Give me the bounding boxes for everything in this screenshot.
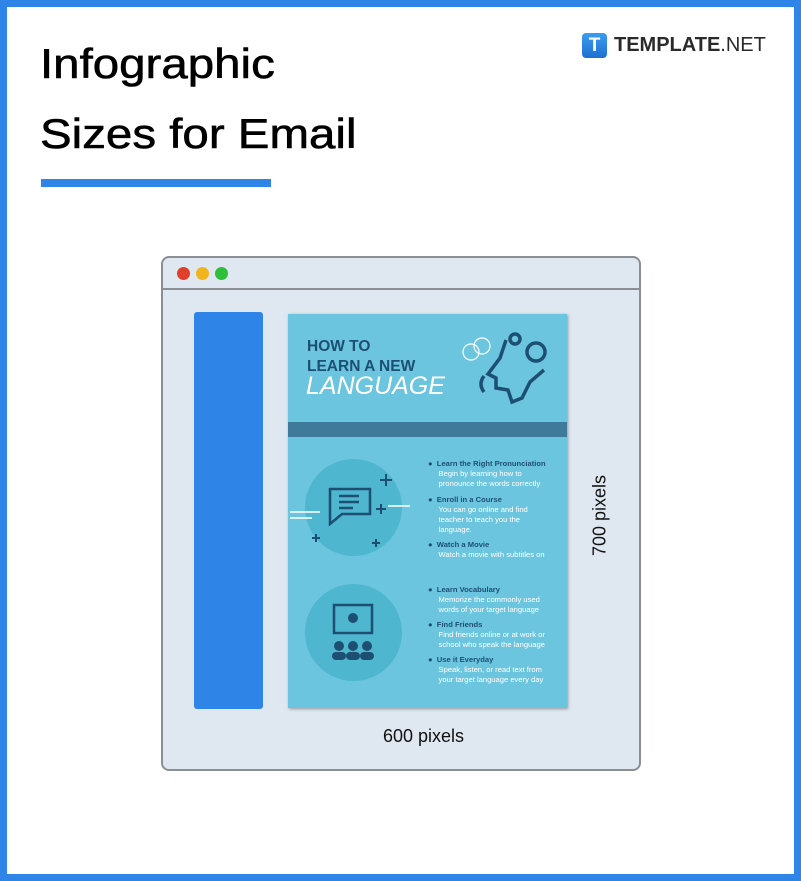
logo: TEMPLATE.NET — [614, 34, 766, 56]
list items: Find friends online or at work or — [439, 630, 545, 639]
list items: pronounce the words correctly — [439, 479, 540, 488]
title: Sizes for Email — [40, 110, 356, 157]
list items: Memorize the commonly used — [439, 595, 540, 604]
title underline — [41, 179, 271, 187]
list items: ● Watch a Movie — [428, 540, 489, 549]
list items — [428, 459, 546, 684]
logo: T — [589, 35, 600, 56]
list items: your target language every day — [439, 675, 543, 684]
browser window — [161, 256, 641, 771]
list items: You can go online and find — [439, 505, 528, 514]
list items: ● Learn Vocabulary — [428, 585, 500, 594]
list items: school who speak the language — [439, 640, 545, 649]
list items: Speak, listen, or read text from — [439, 665, 542, 674]
poster title: LEARN A NEW — [307, 358, 415, 375]
title: Infographic — [40, 40, 275, 87]
list items: Begin by learning how to — [439, 469, 522, 478]
list items: ● Use it Everyday — [428, 655, 493, 664]
dark band — [288, 422, 567, 437]
circle icon: chat — [305, 459, 402, 556]
sidebar — [194, 312, 263, 709]
poster: LANGUAGE — [306, 372, 445, 400]
list items: ● Enroll in a Course — [428, 495, 502, 504]
decorations — [290, 474, 410, 547]
list items: language. — [439, 525, 472, 534]
poster — [288, 314, 567, 708]
icon: head with gears — [462, 332, 547, 404]
poster title — [307, 338, 416, 375]
poster title: HOW TO — [307, 338, 370, 355]
list items: teacher to teach you the — [439, 515, 520, 524]
list items: words of your target language — [439, 605, 539, 614]
list items: Watch a movie with subtitles on — [439, 550, 545, 559]
window dots — [177, 267, 228, 280]
label: width: 600 pixels — [383, 726, 464, 746]
list items: ● Find Friends — [428, 620, 482, 629]
title — [40, 40, 356, 157]
circle icon: audience — [305, 584, 402, 681]
label: height: 700 pixels — [590, 475, 610, 556]
list items: ● Learn the Right Pronunciation — [428, 459, 546, 468]
